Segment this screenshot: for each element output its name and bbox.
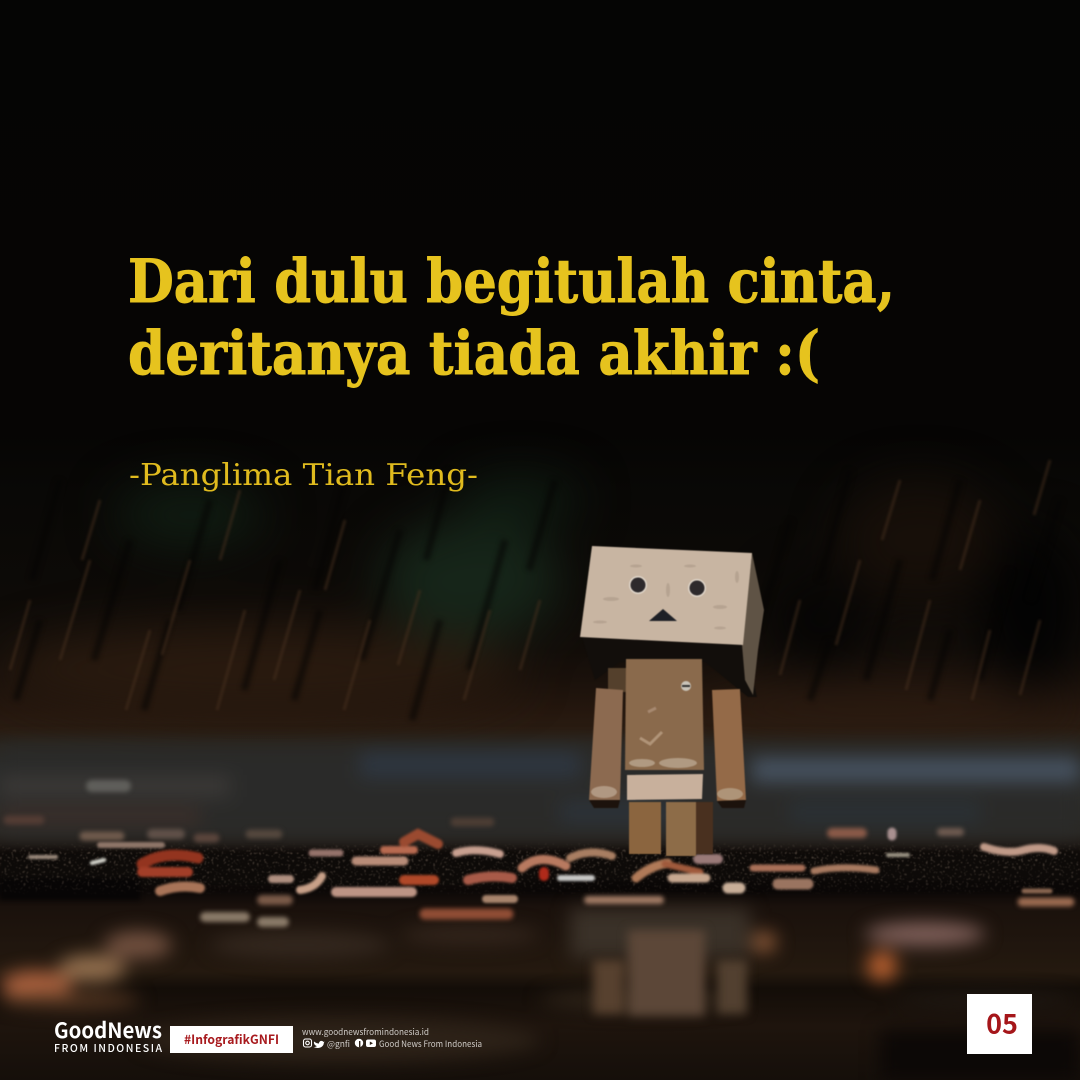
footer website and social handles: @gnfi	[327, 1038, 350, 1050]
title: deritanya tiada akhir :(	[128, 319, 820, 389]
page number badge: 05	[986, 1002, 1018, 1042]
blurred reflection of the figure	[593, 930, 747, 1016]
illustration: cardboard robot figure	[580, 546, 764, 856]
footer website and social handles: Good News From Indonesia	[379, 1038, 482, 1050]
water surface tones below the bank	[0, 745, 1080, 837]
dark rain streaks	[16, 470, 1060, 720]
hashtag badge	[170, 1026, 293, 1053]
photo background: dark rainy scene	[0, 459, 1080, 1080]
title: Dari dulu begitulah cinta,	[128, 247, 895, 317]
title	[128, 247, 895, 389]
attribution: -Panglima Tian Feng-	[129, 458, 478, 493]
robot legs	[629, 802, 713, 856]
footer logo: GoodNews From Indonesia: GoodNews	[54, 1015, 162, 1045]
footer website and social handles: www.goodnewsfromindonesia.id	[302, 1026, 429, 1038]
dark waterline band	[0, 851, 1080, 900]
sharp leaves along the waterline	[30, 832, 1054, 899]
footer website and social handles	[302, 1026, 482, 1050]
hashtag badge: #InfografikGNFI	[184, 1029, 279, 1048]
soft leaves in the shallow water	[8, 786, 1070, 922]
robot head front	[580, 546, 752, 645]
robot waist	[627, 774, 703, 800]
blurred foreground reflections	[0, 908, 1080, 1080]
waterline speckles	[0, 845, 1080, 892]
icon: instagram	[304, 1039, 312, 1047]
robot right arm	[712, 689, 746, 808]
robot head side panel	[742, 553, 764, 695]
robot mouth	[649, 609, 677, 621]
icon: twitter	[314, 1041, 324, 1048]
light rain streaks	[10, 460, 1050, 710]
robot left arm	[589, 688, 623, 808]
robot eyes	[629, 576, 706, 597]
robot head underside and shadow	[582, 637, 757, 697]
icon: facebook	[355, 1039, 363, 1047]
blurred foliage and distant bank	[0, 476, 1080, 724]
footer logo: GoodNews From Indonesia: FROM INDONESIA	[54, 1041, 162, 1056]
page number badge	[967, 994, 1032, 1054]
icon: youtube	[366, 1040, 376, 1047]
robot torso	[608, 659, 704, 770]
